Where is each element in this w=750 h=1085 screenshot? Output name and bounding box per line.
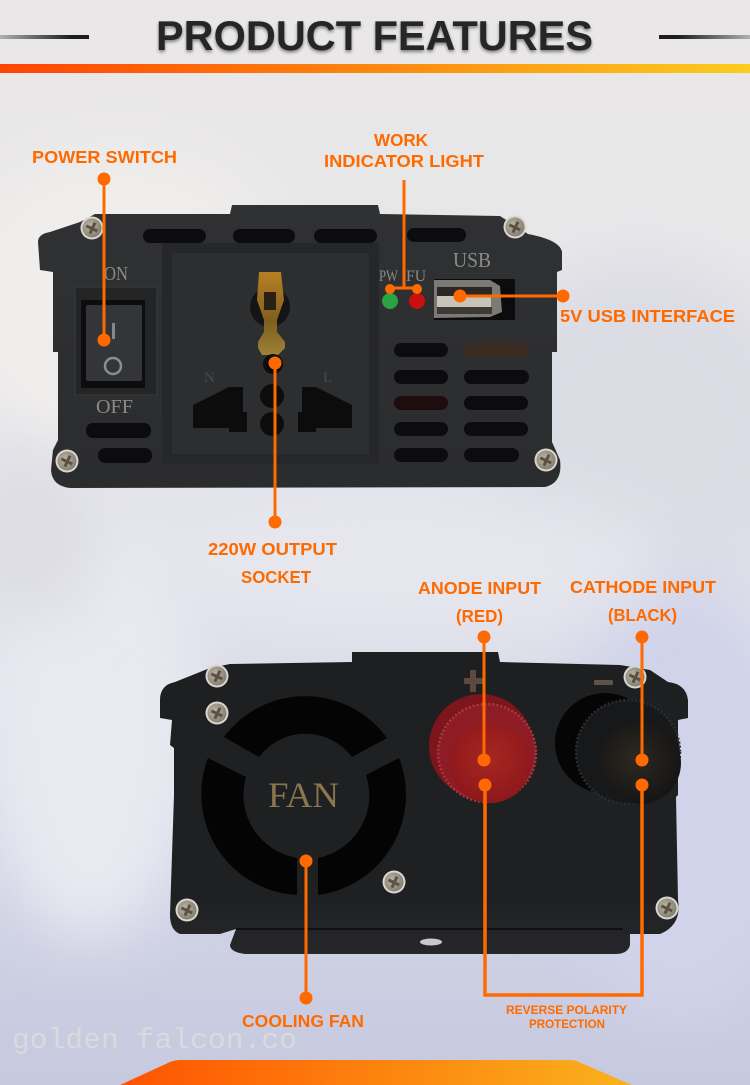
callout: output socket: [208, 356, 337, 587]
rear casing: [160, 652, 688, 954]
callout: anode input: ANODE INPUT: [418, 578, 541, 598]
callout: usb interface: [454, 290, 735, 326]
label OFF: OFF: [96, 396, 133, 418]
black terminal: [555, 693, 681, 804]
label USB: USB: [453, 248, 491, 272]
green LED: [382, 293, 398, 309]
header rule left: [0, 35, 89, 39]
callout: usb interface: 5V USB INTERFACE: [560, 306, 735, 326]
header rule right: [659, 35, 750, 39]
footer trapezoid: [120, 1060, 632, 1085]
callout: cooling fan: COOLING FAN: [242, 1011, 364, 1031]
callout: work indicator light: WORK: [374, 130, 428, 150]
red terminal: [429, 694, 536, 803]
label FU: FU: [406, 268, 426, 285]
top vents: [143, 228, 466, 243]
minus mark: [594, 680, 613, 685]
screws: [56, 216, 558, 472]
callout: output socket: 220W OUTPUT: [208, 539, 337, 559]
socket markings: N: [204, 370, 215, 386]
callout: reverse polarity protection: REVERSE POLARITY: [506, 1005, 627, 1017]
callout: cathode input: (BLACK): [608, 605, 677, 625]
lower left vents: [86, 423, 152, 463]
callout: work indicator light: INDICATOR LIGHT: [324, 151, 484, 171]
label PW: PW: [379, 268, 399, 285]
right vents: [394, 343, 529, 462]
callout: output socket: SOCKET: [241, 567, 311, 587]
label ON: ON: [104, 263, 128, 285]
socket face: [162, 243, 379, 464]
centre holes: [260, 354, 284, 436]
screws: [176, 664, 678, 922]
panel: rear of inverter: [160, 652, 688, 954]
line slot: [298, 387, 352, 432]
rocker switch: [75, 287, 157, 395]
callout: cathode input: [570, 577, 716, 766]
fan opening: [201, 696, 406, 895]
panel: front of inverter: [38, 205, 562, 488]
fan label: FAN: [268, 775, 339, 815]
flange edge: [236, 928, 623, 930]
callout: reverse polarity protection: PROTECTION: [529, 1019, 605, 1031]
watermark: golden falcon.co: [12, 1024, 297, 1057]
callout: work indicator light: [324, 130, 484, 294]
callout: cooling fan: [242, 854, 364, 1031]
socket face: L: [323, 370, 332, 386]
callout: anode input: (RED): [456, 606, 503, 626]
callout: anode input: [418, 578, 541, 766]
callout: power switch: POWER SWITCH: [32, 147, 177, 167]
callout: power switch: [32, 147, 177, 346]
USB port: [434, 279, 515, 320]
gradient title bar: [0, 64, 750, 73]
callout: cathode input: CATHODE INPUT: [570, 577, 716, 597]
plus mark: [464, 670, 484, 692]
callout: reverse polarity protection: [478, 778, 648, 1031]
title: PRODUCT FEATURES: [156, 12, 593, 59]
front casing: [38, 205, 562, 488]
mounting slot: [420, 938, 442, 946]
earth pin: [250, 272, 290, 355]
neutral slot: [193, 387, 247, 432]
red LED: [409, 293, 425, 309]
